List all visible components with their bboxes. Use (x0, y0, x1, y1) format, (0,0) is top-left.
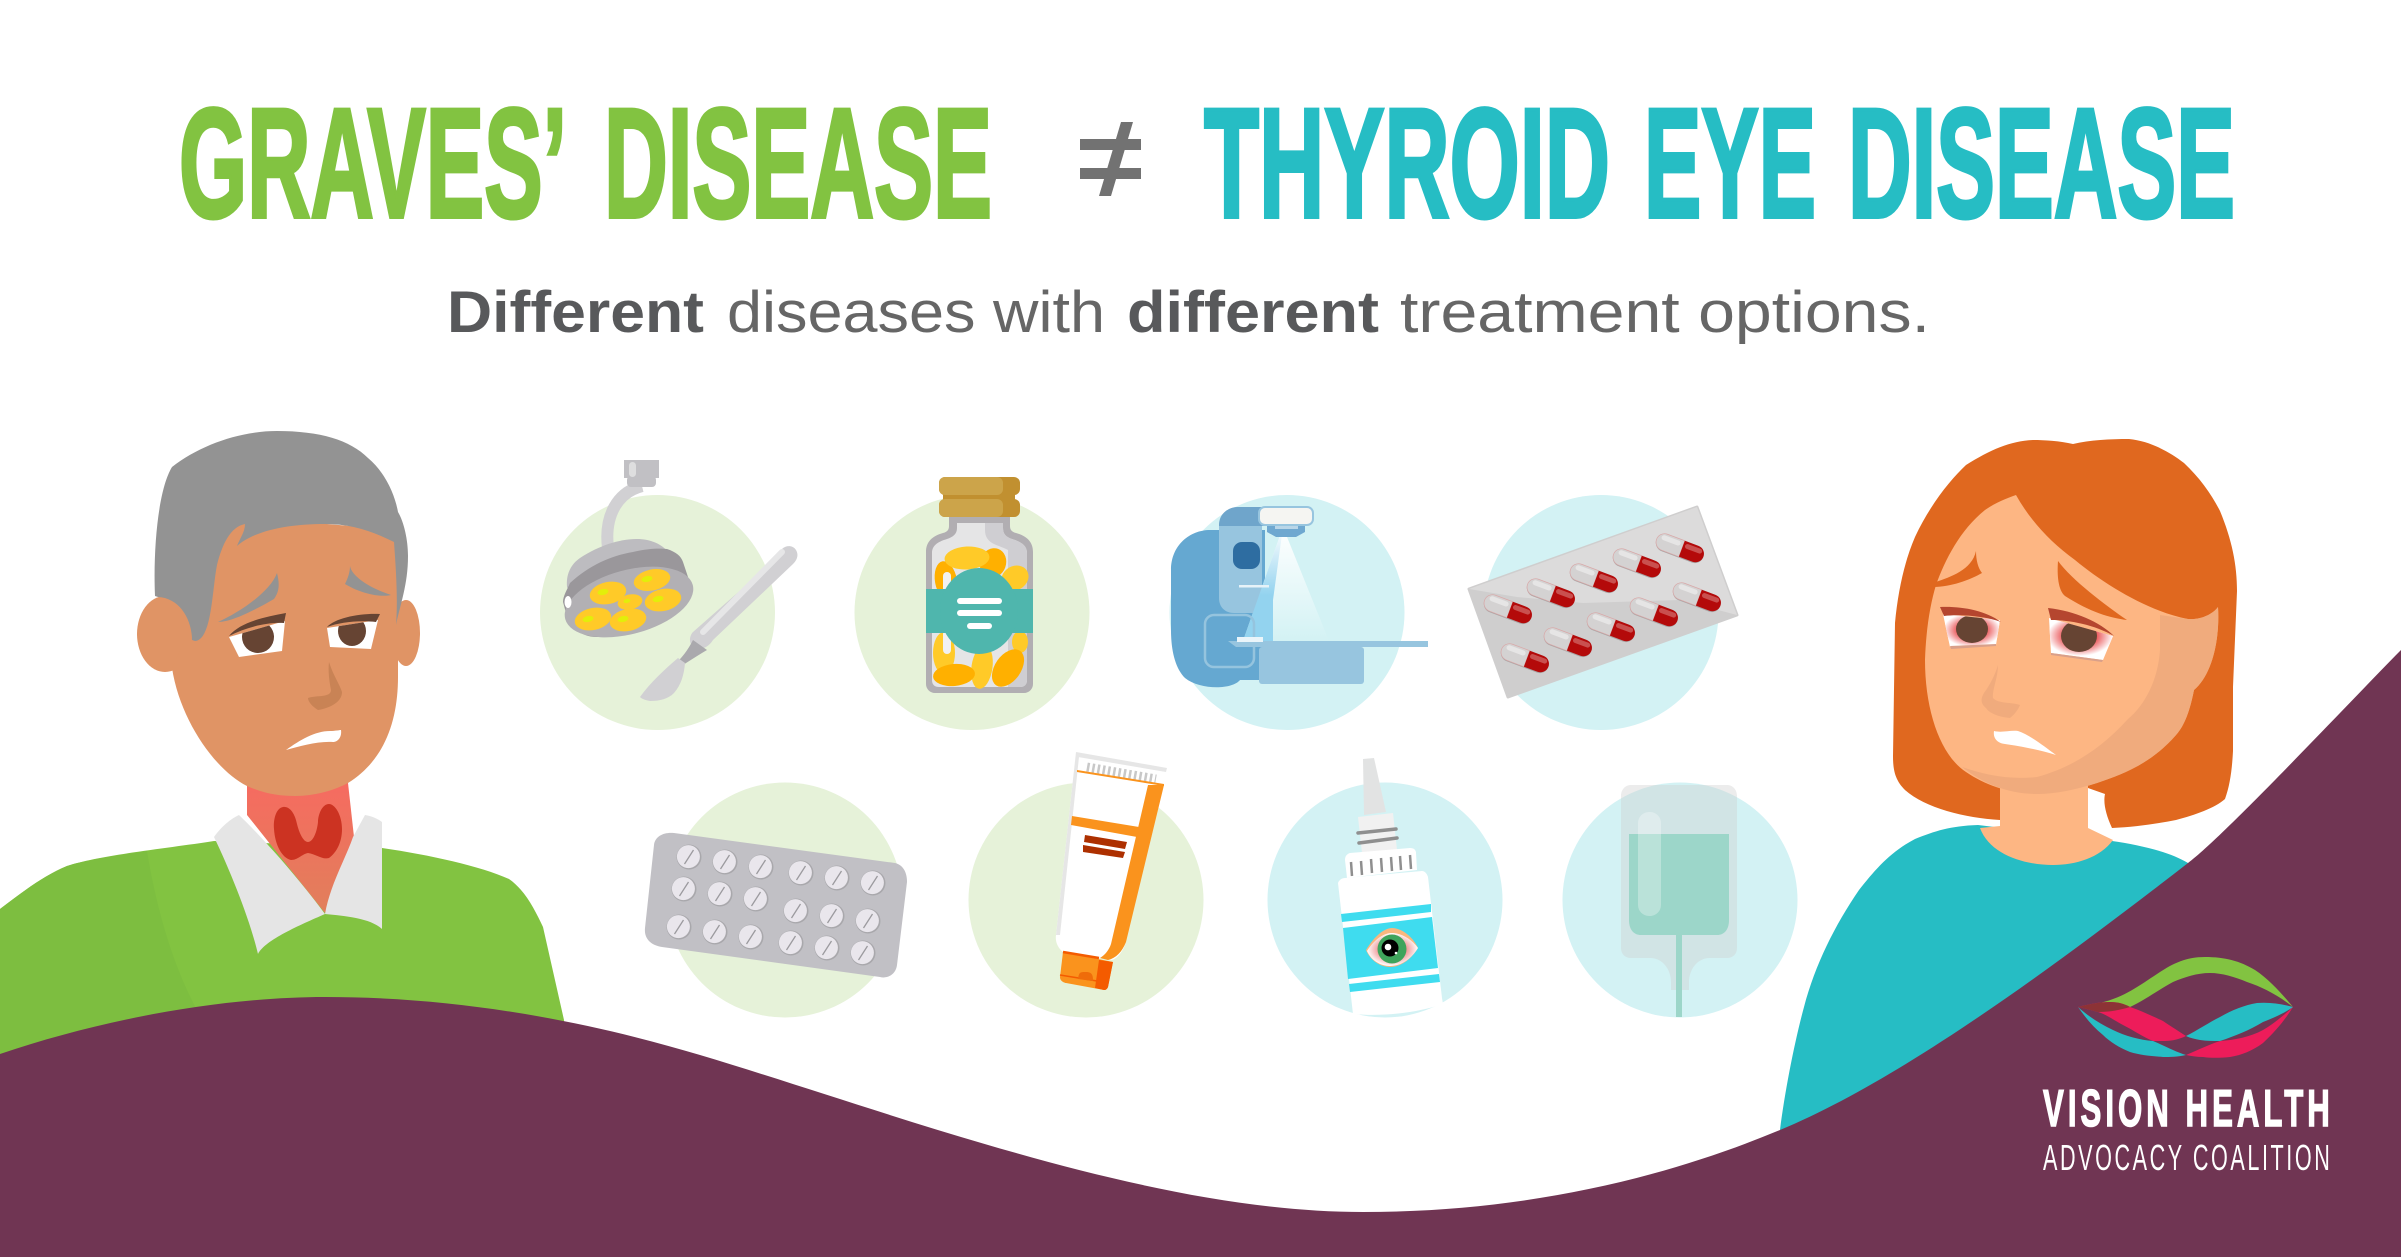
not-equal sign (1080, 122, 1141, 196)
title (179, 77, 2235, 251)
icon: capsule blister pack (1469, 495, 1737, 730)
title: Thyroid Eye Disease: EYE (1644, 77, 1816, 251)
icon: supplement bottle (854, 477, 1090, 730)
logo tagline: ADVOCACY COALITION (2043, 1138, 2330, 1178)
icon: tablet blister pack (645, 782, 907, 1018)
title: Thyroid Eye Disease (1204, 77, 2235, 251)
subtitle: diseases with (727, 280, 1105, 345)
icon: surgical lamp and scalpel (540, 460, 797, 730)
hair (155, 431, 408, 641)
nose (1982, 665, 2020, 718)
logo wordmark: VISION HEALTH (2043, 1080, 2330, 1138)
icon: eye drops bottle (1268, 758, 1502, 1018)
subtitle: treatment options. (1400, 280, 1930, 345)
icon: ointment tube (968, 752, 1204, 1018)
subtitle (447, 280, 1930, 345)
logo: Vision Health Advocacy Coalition (2043, 957, 2330, 1178)
neck (1980, 785, 2113, 865)
face (1925, 495, 2218, 794)
eyebrows (218, 573, 279, 622)
face shadow (1962, 607, 2218, 794)
mouth (1994, 731, 2056, 755)
nose (308, 662, 342, 710)
subtitle: Different (447, 280, 704, 345)
thyroid gland (274, 804, 342, 860)
title: Graves' Disease: GRAVES’ (179, 77, 567, 251)
neck (247, 783, 354, 913)
title: Thyroid Eye Disease: THYROID (1204, 77, 1610, 251)
ears (137, 596, 193, 672)
collar (214, 815, 382, 954)
character: woman with thyroid eye disease (1780, 439, 2237, 1130)
purple wave (0, 650, 2401, 1257)
title: Graves' Disease: DISEASE (604, 77, 992, 251)
character: man with Graves' disease (0, 431, 570, 1100)
back hair (1893, 439, 2237, 828)
logo mark (2078, 957, 2293, 1058)
mouth (286, 730, 341, 750)
shirt (1780, 825, 2300, 1257)
eyes (229, 621, 285, 657)
eyebrows (1934, 551, 1982, 587)
subtitle: different (1127, 280, 1379, 345)
head (172, 515, 398, 796)
icon: laser treatment machine (1170, 495, 1428, 730)
sweater (0, 841, 570, 1100)
icon: IV bag (1562, 782, 1798, 1018)
eyes (1943, 614, 2000, 647)
